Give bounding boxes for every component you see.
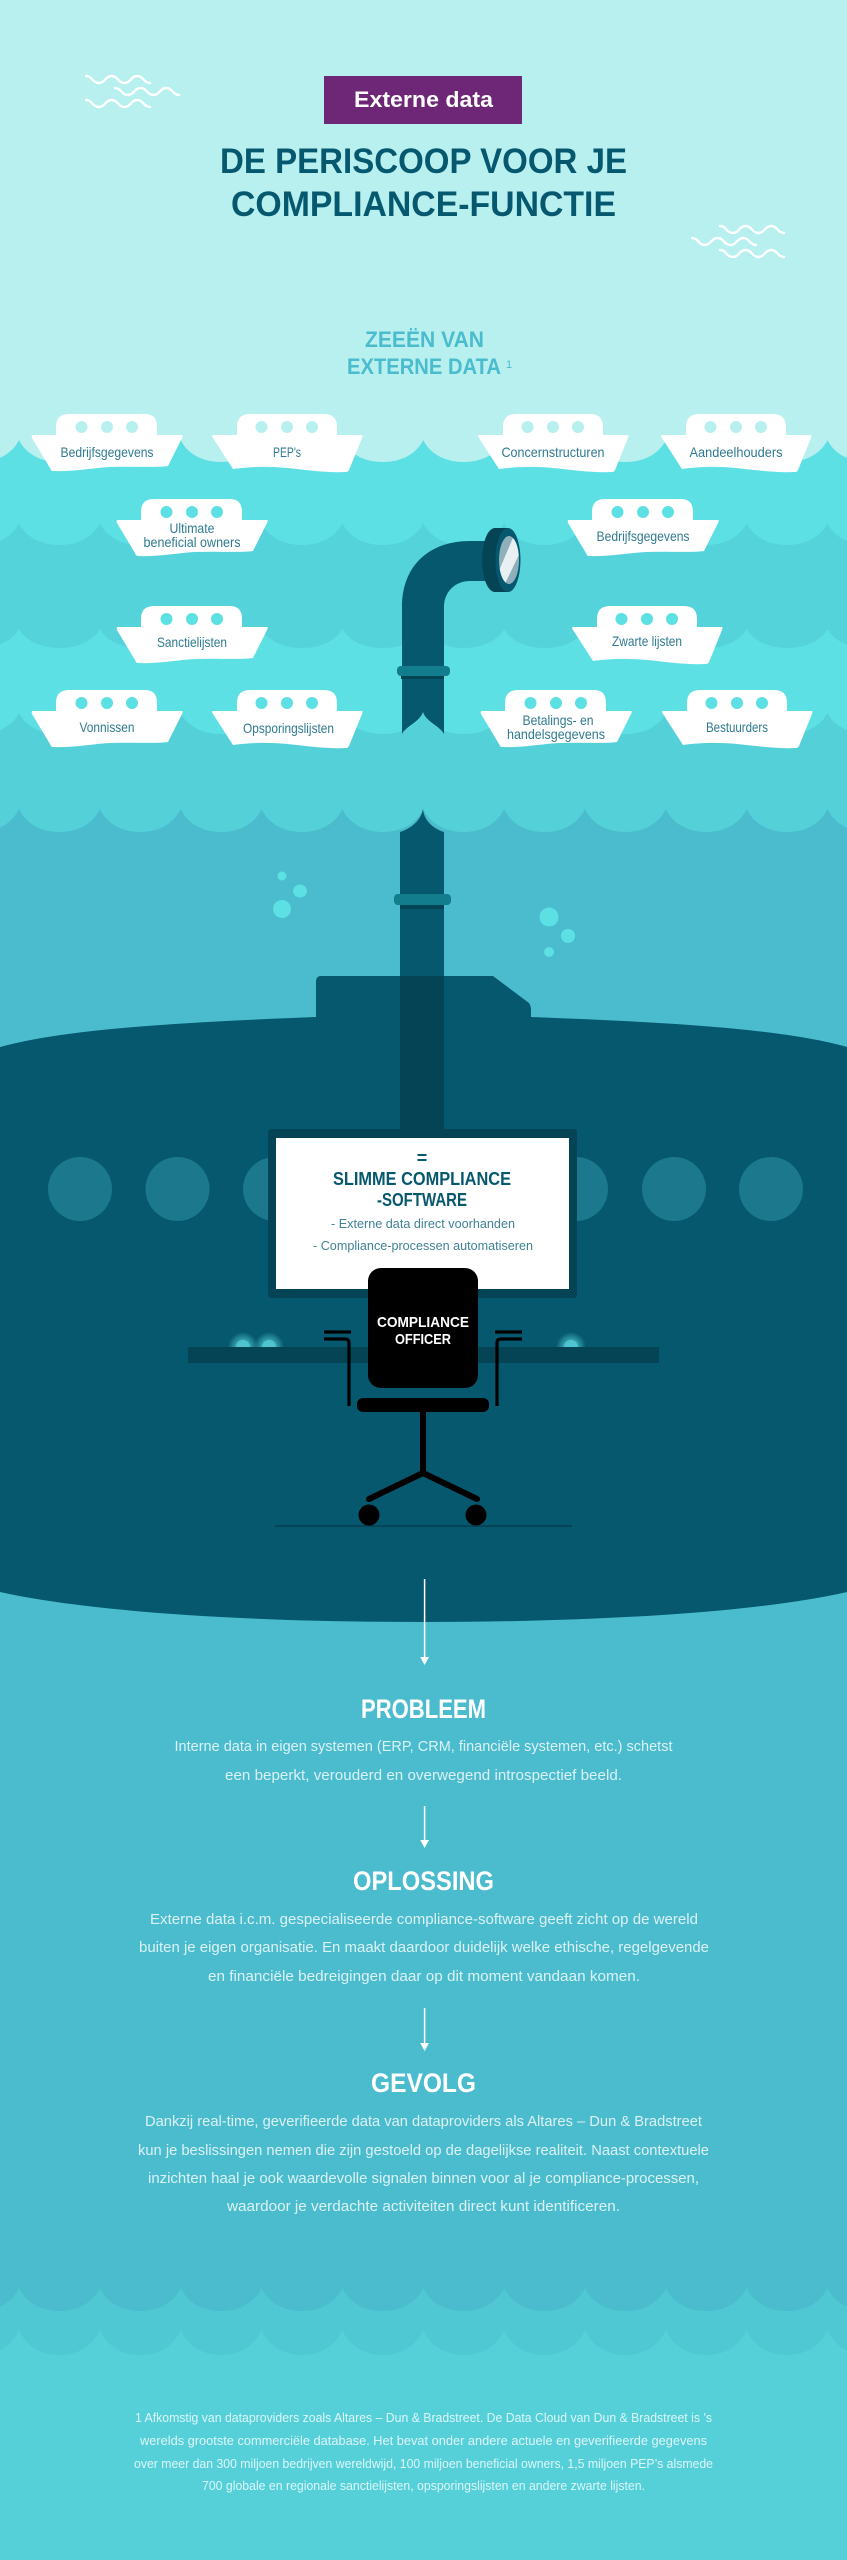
text: probleem: Interne data in eigen systemen (ERP, CRM, financiële systemen, etc.) schetst: [174, 1738, 673, 1755]
boat: Bedrijfsgegevens: Bedrijfsgegevens: [60, 444, 154, 460]
boat: Betalings- en handelsgegevens: handelsgegevens: [507, 726, 605, 742]
boat: Bedrijfsgegevens (right): Bedrijfsgegevens: [596, 528, 690, 544]
subtitle: zeeën van externe data: ZEEËN VAN: [365, 327, 484, 352]
footnote: [134, 2410, 713, 2493]
boat: Vonnissen: [32, 690, 183, 747]
decorative waves: right: [692, 226, 784, 257]
subtitle: zeeën van externe data: 1: [506, 359, 512, 371]
badge: Externe data: Externe data: [354, 87, 494, 112]
boat: Bedrijfsgegevens: [32, 414, 183, 471]
floor line: [275, 1525, 572, 1527]
desk with glowing lights: [188, 1332, 659, 1363]
office chair: compliance officer: OFFICER: [395, 1331, 451, 1348]
text: oplossing: en financiële bedreigingen daar op dit moment vandaan komen.: [208, 1968, 640, 1985]
subtitle: zeeën van externe data: EXTERNE DATA: [347, 354, 501, 379]
periscope: lower pipe under water: [394, 809, 451, 1135]
boat: Sanctielijsten: Sanctielijsten: [157, 634, 227, 650]
arrow 2: [420, 1806, 429, 1848]
monitor with software text: SLIMME COMPLIANCE: [333, 1168, 511, 1189]
boat: PEP's: PEP's: [273, 444, 301, 460]
boat: Ultimate beneficial owners: Ultimate: [170, 520, 215, 536]
text: gevolg: inzichten haal je ook waardevolle signalen binnen voor al je compliance-processen,: [148, 2170, 699, 2187]
text: oplossing: buiten je eigen organisatie. En maakt daardoor duidelijk welke ethische, regelgevende: [139, 1939, 709, 1956]
monitor with software text: -SOFTWARE: [377, 1189, 467, 1210]
heading: Gevolg: GEVOLG: [371, 2068, 476, 2098]
text: gevolg: Dankzij real-time, geverifieerde data van dataproviders als Altares – Dun & Bradstreet: [145, 2113, 703, 2130]
text: gevolg: waardoor je verdachte activiteiten direct kunt identificeren.: [226, 2198, 620, 2215]
boat: Zwarte lijsten: Zwarte lijsten: [612, 633, 682, 649]
text: gevolg: [138, 2113, 709, 2215]
boat: Ultimate beneficial owners: beneficial owners: [144, 534, 240, 550]
monitor with software text: =: [417, 1148, 427, 1168]
submarine hull and tower: [0, 976, 847, 1622]
heading: Oplossing: OPLOSSING: [353, 1866, 494, 1896]
footnote: over meer dan 300 miljoen bedrijven wereldwijd, 100 miljoen beneficial owners, 1,5 miljoen PEP’s alsmede: [134, 2456, 713, 2471]
boat: Vonnissen: Vonnissen: [80, 719, 134, 735]
boat: Concernstructuren: [478, 414, 628, 472]
text: oplossing: [139, 1911, 709, 1985]
boat: Betalings- en handelsgegevens: Betalings- en: [522, 712, 594, 728]
footnote: 1 Afkomstig van dataproviders zoals Altares – Dun & Bradstreet. De Data Cloud van Dun & Bradstreet is ’s: [135, 2410, 712, 2425]
boat: Aandeelhouders: Aandeelhouders: [690, 444, 782, 460]
submarine windows: [48, 1157, 803, 1221]
title: COMPLIANCE-FUNCTIE: [231, 185, 616, 224]
badge: Externe data: [324, 76, 522, 124]
footnote: 700 globale en regionale sanctielijsten, opsporingslijsten en andere zwarte lijsten.: [202, 2478, 645, 2493]
boat: Ultimate beneficial owners: [117, 499, 268, 556]
boat: Sanctielijsten: [117, 606, 268, 663]
monitor with software text: - Externe data direct voorhanden: [331, 1216, 515, 1231]
bubbles right: [540, 908, 575, 957]
office chair: compliance officer: [324, 1268, 522, 1526]
boat: Opsporingslijsten: Opsporingslijsten: [243, 720, 334, 736]
boat: Bestuurders: [662, 690, 812, 748]
boat: Zwarte lijsten: [572, 606, 722, 664]
heading: Probleem: PROBLEEM: [361, 1694, 486, 1724]
title: DE PERISCOOP VOOR JE: [220, 142, 627, 181]
text: gevolg: kun je beslissingen nemen die zijn gestoeld op de dagelijkse realiteit. Naast contextuele: [138, 2142, 709, 2159]
decorative waves: top left: [86, 76, 179, 107]
periscope lens head: [482, 528, 520, 592]
periscope: upper pipe above the waterline: [397, 528, 525, 734]
footnote: werelds grootste commerciële database. Het bevat onder andere actuele en geverifieerde gegevens: [139, 2433, 707, 2448]
monitor with software text: [268, 1129, 577, 1298]
boat: PEP's: [212, 414, 362, 472]
title: [220, 142, 627, 224]
subtitle: zeeën van externe data: [347, 327, 512, 379]
office chair: compliance officer: COMPLIANCE: [377, 1314, 469, 1331]
boat: Bestuurders: Bestuurders: [706, 719, 768, 735]
arrow 3: [420, 2008, 429, 2051]
boat: Opsporingslijsten: [212, 690, 362, 748]
text: probleem: een beperkt, verouderd en overwegend introspectief beeld.: [225, 1767, 622, 1784]
bubbles left: [273, 872, 307, 918]
text: probleem: [174, 1738, 673, 1784]
arrow 1: [420, 1579, 429, 1665]
boat: Bedrijfsgegevens (right): [568, 499, 719, 556]
boat: Aandeelhouders: [661, 414, 812, 472]
boat: Concernstructuren: Concernstructuren: [502, 444, 604, 460]
monitor with software text: - Compliance-processen automatiseren: [313, 1238, 533, 1253]
boat: Betalings- en handelsgegevens: [481, 690, 632, 747]
text: oplossing: Externe data i.c.m. gespecialiseerde compliance-software geeft zicht op de wereld: [150, 1911, 698, 1928]
